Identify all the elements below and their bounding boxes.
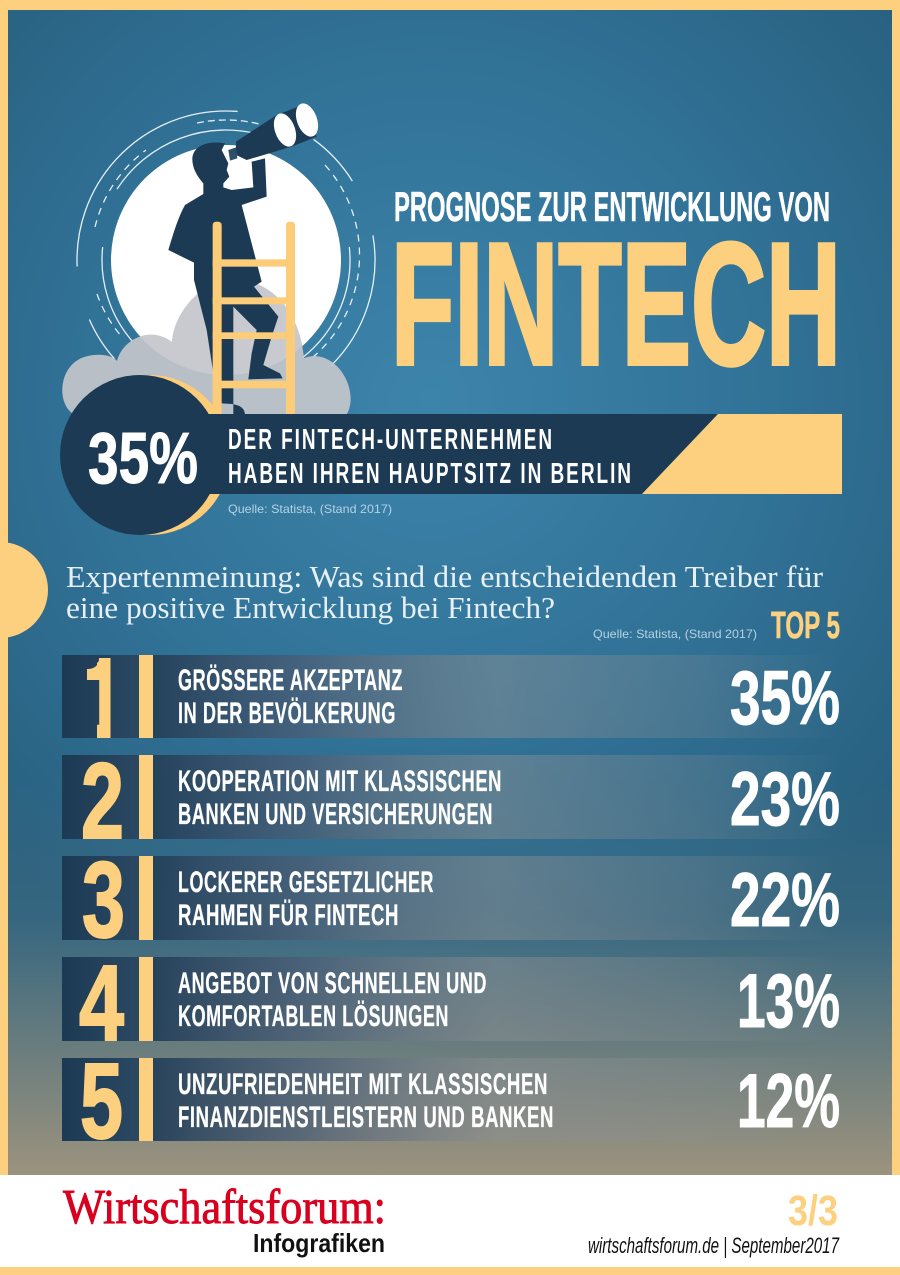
ranking row 3: LOCKERER GESETZLICHER	[178, 866, 434, 899]
ranking row 3	[62, 839, 840, 960]
source note: Quelle: Statista, (Stand 2017)	[228, 502, 392, 516]
ranking row 2: KOOPERATION MIT KLASSISCHEN	[178, 765, 502, 798]
ranking row 1	[62, 655, 839, 738]
illustration: man with binoculars on a ladder	[16, 50, 436, 470]
ranking row 5: 5	[80, 1040, 123, 1161]
moon circle	[111, 145, 341, 375]
ranking row 2: 23%	[730, 757, 840, 842]
ranking row 5	[62, 1040, 840, 1161]
callout text: DER FINTECH-UNTERNEHMEN	[228, 424, 554, 456]
ranking row 1: 35%	[730, 656, 840, 741]
footer subtitle: Infografiken	[253, 1228, 385, 1258]
heading: expert opinion: Expertenmeinung: Was sind die entscheidenden Treiber für	[66, 560, 823, 594]
binoculars	[228, 100, 322, 161]
callout: 35 percent headquarters in Berlin	[60, 375, 842, 535]
yellow bar end	[642, 414, 842, 494]
ranking row 2: 2	[81, 740, 124, 861]
ranking row 1: GRÖSSERE AKZEPTANZ	[178, 664, 403, 697]
callout number: 35%	[88, 419, 198, 499]
title	[391, 183, 841, 401]
navy bar	[140, 414, 718, 494]
source note 2: Quelle: Statista, (Stand 2017)	[593, 627, 757, 641]
ranking row 3: RAHMEN FÜR FINTECH	[178, 899, 399, 932]
navy circle	[60, 375, 220, 535]
ranking row 4	[62, 942, 840, 1063]
radar arcs	[16, 50, 436, 470]
ranking row 2	[62, 740, 840, 861]
ranking row 4: 13%	[737, 959, 840, 1044]
heading: expert opinion: eine positive Entwicklung bei Fintech?	[66, 591, 555, 625]
ranking row 4: 4	[79, 942, 124, 1063]
callout text: HABEN IHREN HAUPTSITZ IN BERLIN	[228, 458, 633, 490]
ranking row 3: 22%	[730, 858, 840, 943]
ladder	[213, 222, 295, 415]
ranking row 2: BANKEN UND VERSICHERUNGEN	[178, 798, 493, 831]
ranking row 5: 12%	[737, 1059, 840, 1144]
ranking row 5: UNZUFRIEDENHEIT MIT KLASSISCHEN	[178, 1068, 548, 1101]
ranking row 1: IN DER BEVÖLKERUNG	[178, 697, 396, 730]
footer logo: Wirtschaftsforum:	[63, 1179, 386, 1234]
top 5 label: TOP 5	[771, 605, 840, 647]
yellow crescent	[70, 375, 230, 535]
ranking row 1: 1	[82, 638, 126, 761]
man silhouette	[168, 142, 283, 415]
ranking row 4: KOMFORTABLEN LÖSUNGEN	[178, 1000, 449, 1033]
heading: expert opinion	[66, 560, 823, 625]
side semicircle tab	[0, 542, 48, 638]
callout text	[228, 424, 633, 490]
ranking row 3: 3	[82, 839, 125, 960]
ranking row 5: FINANZDIENSTLEISTERN UND BANKEN	[178, 1101, 554, 1134]
clouds	[62, 279, 351, 415]
ranking row 4: ANGEBOT VON SCHNELLEN UND	[178, 967, 487, 1000]
page number: 3/3	[788, 1187, 838, 1235]
footer	[0, 1175, 900, 1267]
